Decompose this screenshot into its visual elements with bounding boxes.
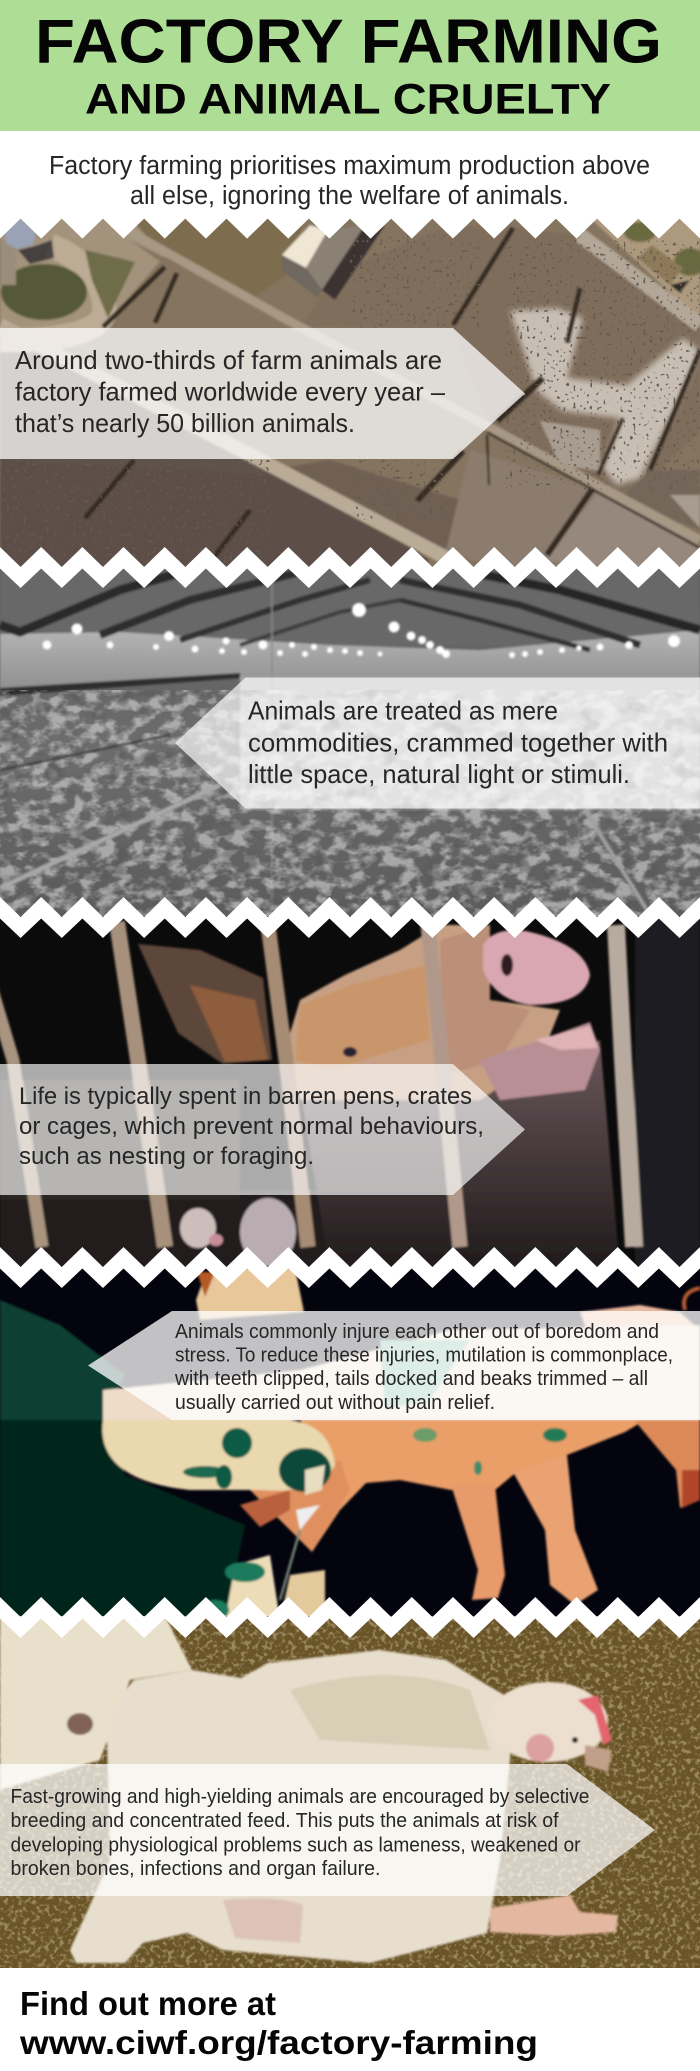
callout arrow 4: Animals commonly injure each other out of boredom and — [175, 1320, 659, 1343]
callout arrow 2: little space, natural light or stimuli. — [248, 759, 630, 789]
callout arrow 4: stress. To reduce these injuries, mutilation is commonplace, — [175, 1344, 673, 1366]
footer call to action: Find out more at — [20, 1985, 276, 2022]
footer call to action: www.ciwf.org/factory-farming — [19, 2024, 538, 2061]
roads — [130, 232, 700, 540]
piglets — [180, 1208, 216, 1248]
intro text: all else, ignoring the welfare of animals. — [130, 182, 569, 210]
snout — [483, 930, 590, 1005]
bright floor far end — [240, 677, 700, 810]
pale piglet under callout — [103, 1325, 700, 1420]
callout arrow 1: that’s nearly 50 billion animals. — [15, 408, 355, 438]
upper left yard — [0, 218, 170, 330]
piglet body — [296, 1420, 645, 1552]
ear — [138, 944, 272, 1064]
callout arrow 2: Animals are treated as mere — [248, 696, 558, 726]
callout arrow 3: such as nesting or foraging. — [19, 1143, 314, 1170]
crate bars — [117, 922, 165, 1247]
callout arrow 5: breeding and concentrated feed. This puts the animals at risk of — [10, 1810, 559, 1832]
main hen body — [70, 1650, 513, 1963]
callout arrow 1: Around two-thirds of farm animals are — [15, 345, 442, 375]
title line 2: AND ANIMAL CRUELTY — [85, 76, 611, 124]
pig ear and blade — [240, 1490, 290, 1527]
cattle specks — [350, 235, 480, 327]
zigzag divider 1 — [0, 547, 700, 588]
silo pad and road — [0, 245, 104, 340]
belly — [223, 1898, 303, 1943]
callout arrow 4: with teeth clipped, tails docked and beaks trimmed – all — [174, 1367, 648, 1390]
callout arrow 5: Fast-growing and high-yielding animals are encouraged by selective — [10, 1786, 590, 1808]
callout arrow 3: Life is typically spent in barren pens, crates — [19, 1083, 472, 1110]
title line 1: FACTORY FARMING — [35, 8, 662, 76]
lower pens — [0, 353, 420, 554]
callout arrow 5 — [0, 1764, 655, 1896]
foot — [490, 1895, 618, 1936]
callout arrow 2 — [175, 678, 700, 808]
litter texture — [0, 1616, 700, 1968]
green markings — [222, 1428, 252, 1458]
chicken flock texture — [0, 690, 700, 920]
dark fence lines — [85, 225, 700, 557]
upper right verge — [590, 218, 700, 320]
panel: pig in crate photo — [0, 916, 700, 1270]
panel: lame broiler chicken photo — [0, 1616, 700, 1968]
callout arrow 2: commodities, crammed together with — [248, 728, 668, 758]
glove hand — [102, 1420, 335, 1491]
left hen — [0, 1616, 192, 1790]
piglet legs — [451, 1485, 505, 1600]
zigzag top edge — [0, 216, 700, 239]
zigzag divider 2 — [0, 897, 700, 938]
right pens — [530, 288, 697, 475]
callout arrow 1: factory farmed worldwide every year – — [15, 376, 446, 406]
piglet ear top — [196, 1268, 304, 1320]
barn — [282, 225, 328, 268]
sow body — [300, 1040, 620, 1270]
callout arrow 3: or cages, which prevent normal behaviours, — [19, 1113, 484, 1140]
header banner — [0, 0, 700, 131]
chin — [480, 1022, 600, 1100]
intro text — [49, 152, 650, 210]
head — [285, 925, 560, 1100]
callout arrow 3 — [0, 1064, 525, 1195]
callout arrow 5: broken bones, infections and organ failure. — [10, 1858, 380, 1880]
callout arrow 5: developing physiological problems such as lameness, weakened or — [10, 1834, 581, 1856]
zigzag divider 4 — [0, 1597, 700, 1638]
head — [488, 1682, 608, 1762]
roof trusses — [0, 570, 190, 632]
panel: piglet mutilation photo — [0, 1266, 700, 1620]
comb — [578, 1695, 612, 1745]
panel: chicken shed photo — [0, 566, 700, 920]
panel: aerial feedlot photo — [0, 218, 700, 574]
intro text: Factory farming prioritises maximum production above — [49, 152, 650, 180]
bright manure patch — [510, 308, 700, 485]
callout arrow 1 — [0, 328, 525, 459]
shed lights — [42, 603, 680, 658]
callout arrow 4: usually carried out without pain relief. — [175, 1391, 495, 1414]
lower fingers — [225, 1555, 280, 1620]
side wall — [0, 630, 700, 692]
zigzag divider 3 — [0, 1247, 700, 1288]
callout arrow 4 — [88, 1311, 700, 1420]
worker jacket — [0, 1300, 245, 1620]
footer call to action — [19, 1985, 538, 2061]
